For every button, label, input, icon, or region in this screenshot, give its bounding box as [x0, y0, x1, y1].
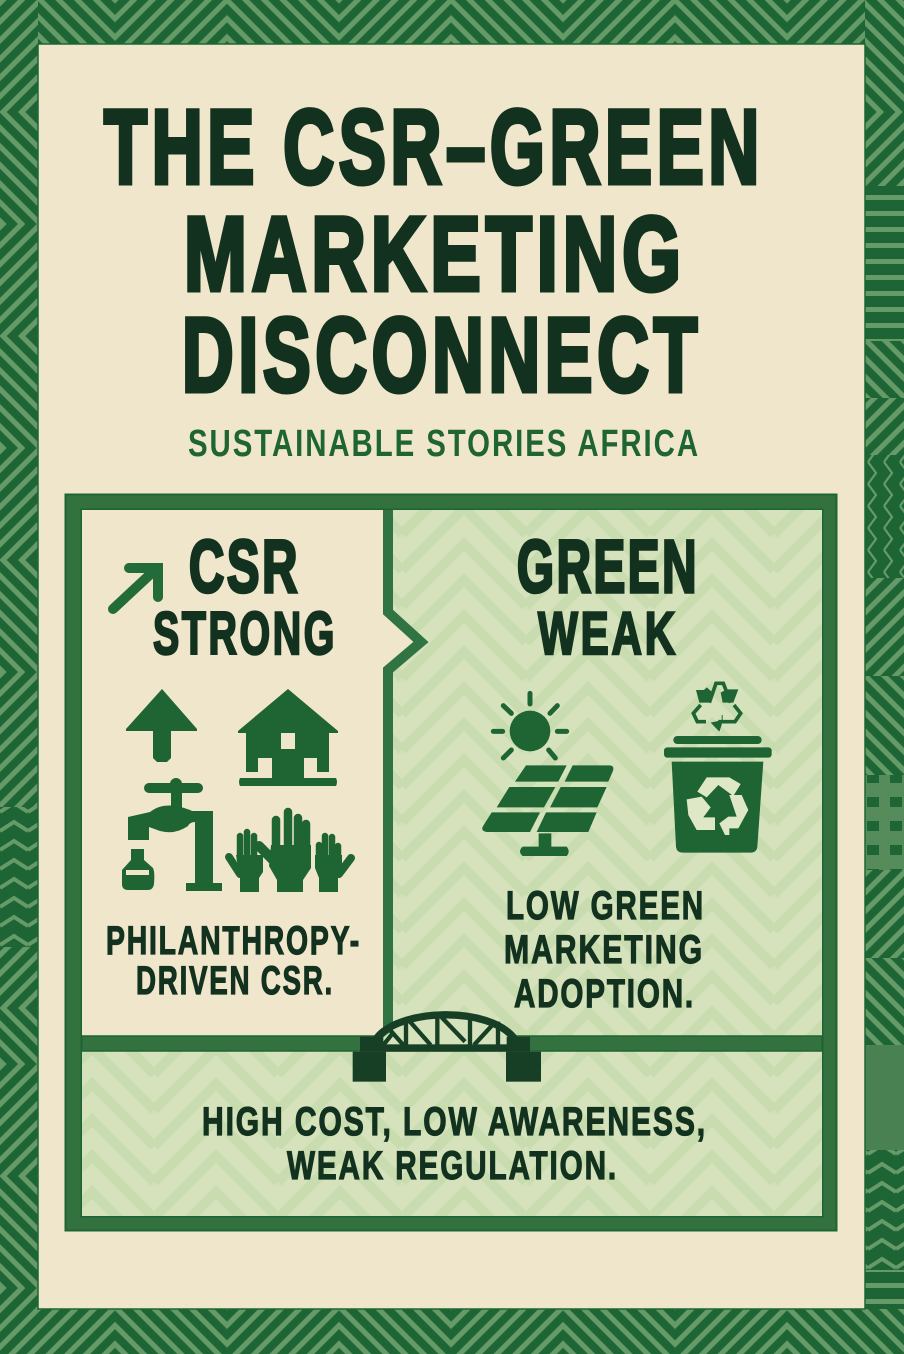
heading: csr: CSR — [189, 525, 300, 608]
outer frame — [74, 502, 830, 1223]
chevron divider — [388, 510, 421, 1036]
icon: up arrow pictogram — [126, 689, 197, 762]
icon: recycling bin — [664, 683, 772, 853]
icon: water tap — [128, 778, 222, 891]
text: low green marketing adoption — [504, 884, 705, 1016]
horizontal divider — [82, 1036, 822, 1051]
text: low green marketing adoption: MARKETING — [504, 928, 704, 972]
left band patterns — [0, 0, 38, 1309]
panel: csr strong — [82, 510, 421, 1036]
icon: house — [238, 689, 338, 786]
right band patterns — [865, 0, 904, 1309]
heading: green: GREEN — [517, 525, 699, 608]
text: philanthropy-driven csr — [106, 919, 361, 1003]
text: philanthropy-driven csr: PHILANTHROPY- — [106, 919, 361, 963]
icon: bridge — [353, 1015, 541, 1082]
text: barriers — [202, 1100, 707, 1188]
icon: bottle — [122, 849, 154, 890]
heading: strong: STRONG — [153, 600, 337, 667]
icon: upward arrow — [113, 568, 158, 609]
text: barriers: WEAK REGULATION. — [287, 1144, 618, 1188]
text: philanthropy-driven csr: DRIVEN CSR. — [136, 959, 334, 1003]
title — [104, 89, 764, 414]
top band chevrons — [0, 0, 904, 44]
panel: barriers — [82, 1036, 822, 1216]
heading: weak: WEAK — [538, 600, 678, 667]
subtitle: SUSTAINABLE STORIES AFRICA — [188, 423, 700, 465]
bottom band chevrons — [0, 1309, 904, 1354]
framed comparison diagram — [66, 494, 836, 1230]
text: low green marketing adoption: LOW GREEN — [506, 884, 705, 928]
icon: sun above solar panel — [482, 693, 613, 856]
title line 2: MARKETING — [184, 196, 686, 313]
text: low green marketing adoption: ADOPTION. — [514, 972, 695, 1016]
text: barriers: HIGH COST, LOW AWARENESS, — [202, 1100, 707, 1144]
panel: green weak — [383, 510, 822, 1036]
icon: three raised hands — [229, 812, 351, 892]
